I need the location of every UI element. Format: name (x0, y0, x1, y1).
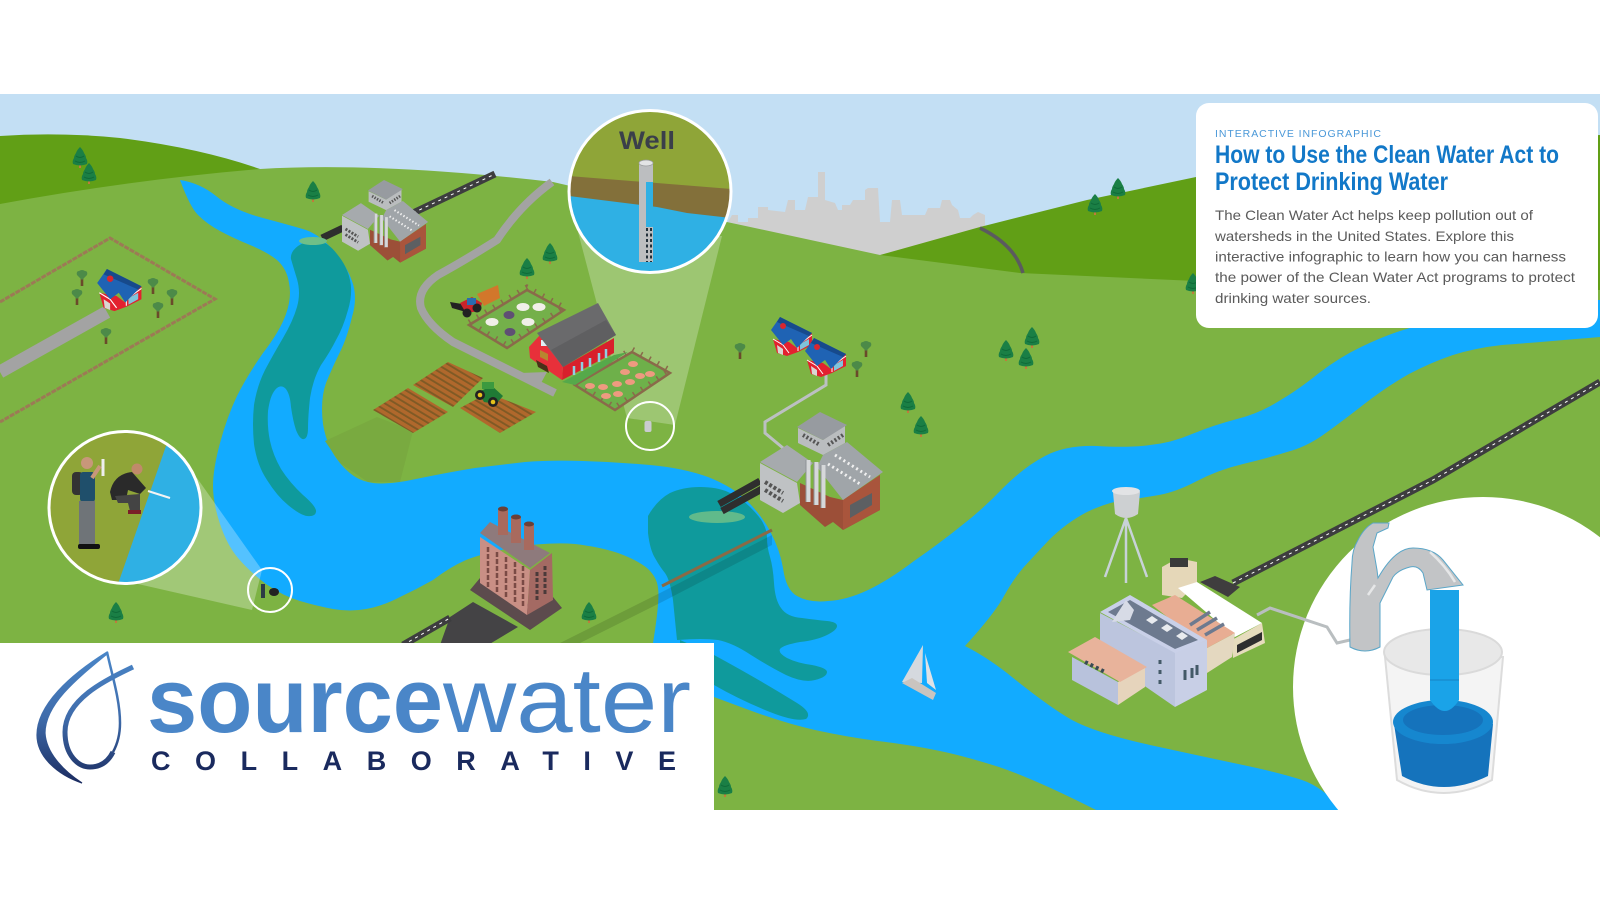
lower pollution plume (648, 487, 837, 720)
service pipe to faucet (1257, 608, 1350, 643)
middle factory (760, 412, 883, 530)
well marker circle (626, 402, 674, 450)
discharge pipe top factory (299, 228, 343, 245)
sampling callout circle (48, 431, 202, 585)
green tractor (475, 382, 503, 407)
logo drop icon (37, 652, 133, 783)
farm road (420, 182, 555, 393)
infographic scene (0, 94, 1600, 810)
people light cone (138, 478, 262, 610)
highway to treatment plant (1233, 382, 1600, 583)
standing person (72, 457, 104, 549)
water treatment plant (1068, 558, 1265, 707)
main green land (0, 167, 1600, 810)
red tractor with trailer (450, 285, 500, 318)
hill road (980, 228, 1023, 273)
top factory (342, 180, 428, 263)
card body text: interactive infographic to learn how you can harness (1215, 248, 1566, 264)
card body text: drinking water sources. (1215, 290, 1371, 306)
card eyebrow: INTERACTIVE INFOGRAPHIC (1215, 128, 1381, 140)
left farmhouse (97, 269, 141, 311)
card body text (1214, 207, 1575, 306)
left farm fence (0, 238, 215, 422)
field shadow patch (325, 417, 413, 482)
brick power plant (470, 506, 562, 630)
houses pair (771, 317, 846, 377)
road to top factory (413, 174, 495, 213)
crop fields (373, 362, 536, 433)
right dark green hill (880, 135, 1600, 300)
logo wordmark: source (147, 650, 443, 752)
water stream (1430, 590, 1459, 711)
drinking water circle (1293, 497, 1600, 877)
card body text: watersheds in the United States. Explore this (1214, 228, 1514, 244)
crouching person (110, 464, 170, 514)
logo wordmark (147, 650, 691, 752)
logo panel (0, 643, 714, 810)
left farm driveway (0, 312, 107, 372)
glass of water (1384, 629, 1503, 793)
pipe from houses to factory (765, 373, 826, 448)
faucet (1350, 523, 1463, 651)
red barn (529, 303, 628, 385)
plant parking lot (1200, 576, 1240, 597)
well pipe (639, 160, 653, 262)
brick power plant parking lot (440, 602, 518, 645)
pine trees (73, 147, 1200, 797)
well label: Well (619, 127, 675, 155)
card title (1215, 141, 1559, 196)
shrubs (72, 270, 871, 377)
dam across river (560, 530, 772, 643)
sailboat (902, 645, 936, 700)
sky (0, 94, 1600, 226)
logo wordmark: water (442, 650, 691, 752)
middle factory discharge (689, 481, 762, 523)
road to power plant (403, 618, 450, 645)
water tower (1105, 487, 1147, 583)
left dark green hill (0, 134, 260, 205)
logo collaborative line: COLLABORATIVE (151, 746, 676, 776)
cow pen (469, 287, 564, 348)
card body text: the power of the Clean Water Act programs to protect (1215, 269, 1575, 285)
card body text: The Clean Water Act helps keep pollution out of (1215, 207, 1533, 223)
info card (1196, 103, 1598, 328)
people marker circle (248, 568, 292, 612)
upper pollution plume (253, 241, 351, 516)
card title: Protect Drinking Water (1215, 168, 1448, 196)
farm driveway patch (524, 372, 547, 382)
pig pen (575, 349, 670, 410)
well light cone (578, 232, 722, 425)
well callout circle (569, 110, 731, 275)
city skyline (728, 172, 985, 258)
river (180, 180, 1600, 812)
